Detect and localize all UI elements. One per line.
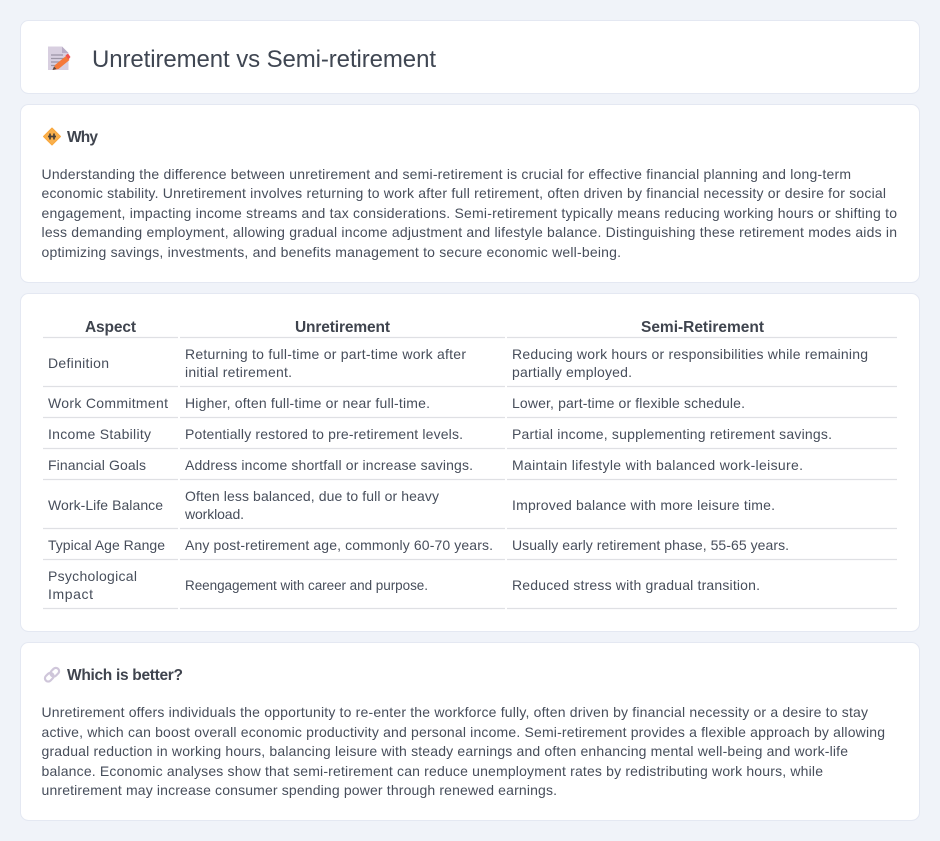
text block: why: engagement, impacting income streams and tax considerations. Semi-retirement typically means reducing working hours or shifting to — [42, 205, 897, 221]
row: financial goals: Address income shortfall or increase savings. — [185, 457, 473, 473]
table header — [85, 319, 764, 336]
panel: which is better — [20, 642, 920, 820]
row: work-life balance: workload. — [184, 506, 244, 522]
icon: diamond sign — [44, 128, 60, 145]
text block: which is better: unretirement may increase consumer spending power through renewed earnings. — [42, 782, 557, 798]
row: definition: partially employed. — [512, 364, 632, 380]
row: work-life balance: Improved balance with more leisure time. — [512, 497, 775, 513]
text block: why: less demanding employment, allowing gradual income adjustment and lifestyle balance. Distinguishing these retirement modes aids in — [42, 224, 897, 240]
row: income stability: Income Stability — [48, 426, 151, 442]
row: psychological impact: Psychological — [48, 568, 137, 584]
row: definition: initial retirement. — [185, 364, 292, 380]
table header: Unretirement — [295, 319, 390, 336]
icon: document with pencil — [48, 46, 70, 70]
text block: why — [42, 166, 897, 260]
row: work commitment: Higher, often full-time or near full-time. — [185, 395, 430, 411]
row: typical age range: Usually early retirement phase, 55-65 years. — [512, 537, 789, 553]
row: typical age range: Typical Age Range — [48, 537, 165, 553]
table header: Aspect — [85, 319, 136, 336]
row: financial goals: Financial Goals — [48, 457, 146, 473]
icon: link — [44, 667, 60, 683]
row: work-life balance: Work-Life Balance — [48, 497, 163, 513]
row: psychological impact: Impact — [48, 586, 93, 602]
text block: which is better: gradual reduction in working hours, balancing leisure with steady earnings and often enhancing mental well-being and work-life — [42, 743, 848, 759]
row: work-life balance: Often less balanced, due to full or heavy — [185, 488, 439, 504]
row: financial goals — [48, 457, 803, 473]
text block: which is better: balance. Economic analyses show that semi-retirement can reduce unemployment rates by redistributing work hours, while — [42, 763, 823, 779]
row: financial goals: Maintain lifestyle with balanced work-leisure. — [512, 457, 803, 473]
panel: header — [20, 20, 920, 94]
heading: which is better: Which is better? — [67, 667, 183, 684]
row: work commitment: Work Commitment — [48, 395, 168, 411]
table header: Semi-Retirement — [641, 319, 764, 336]
panel: comparison table — [20, 294, 920, 632]
text block: why: economic stability. Unretirement involves returning to work after full retirement, often driven by financial necessity or desire for social — [42, 185, 886, 201]
row: work commitment: Lower, part-time or flexible schedule. — [512, 395, 745, 411]
row: definition — [48, 346, 868, 380]
row: definition: Reducing work hours or responsibilities while remaining — [512, 346, 868, 362]
text block: which is better: Unretirement offers individuals the opportunity to re-enter the workforce fully, often driven by financial necessity or a desire to stay — [42, 704, 868, 720]
row: definition: Definition — [48, 355, 109, 371]
row: psychological impact: Reengagement with career and purpose. — [185, 578, 428, 593]
panel: why — [20, 104, 920, 282]
row: psychological impact — [48, 568, 760, 602]
text block: which is better: active, which can boost overall economic productivity and personal income. Semi-retirement provides a flexible approach by allowing — [42, 724, 885, 740]
row: psychological impact: Reduced stress with gradual transition. — [512, 577, 760, 593]
text block: why: Understanding the difference between unretirement and semi-retirement is crucial for effective financial planning and long-term — [42, 166, 851, 182]
heading: why: Why — [67, 129, 98, 146]
row: income stability: Potentially restored to pre-retirement levels. — [185, 426, 463, 442]
row: work commitment — [48, 395, 745, 411]
text block: why: optimizing savings, investments, and benefits management to secure economic well-being. — [42, 244, 621, 260]
row: income stability — [48, 426, 832, 442]
row: definition: Returning to full-time or part-time work after — [185, 346, 466, 362]
text block: which is better — [42, 704, 885, 798]
row: typical age range: Any post-retirement age, commonly 60-70 years. — [185, 537, 493, 553]
row: income stability: Partial income, supplementing retirement savings. — [512, 426, 832, 442]
row: work-life balance — [48, 488, 775, 522]
row: typical age range — [48, 537, 789, 553]
title: Unretirement vs Semi-retirement — [92, 46, 436, 73]
